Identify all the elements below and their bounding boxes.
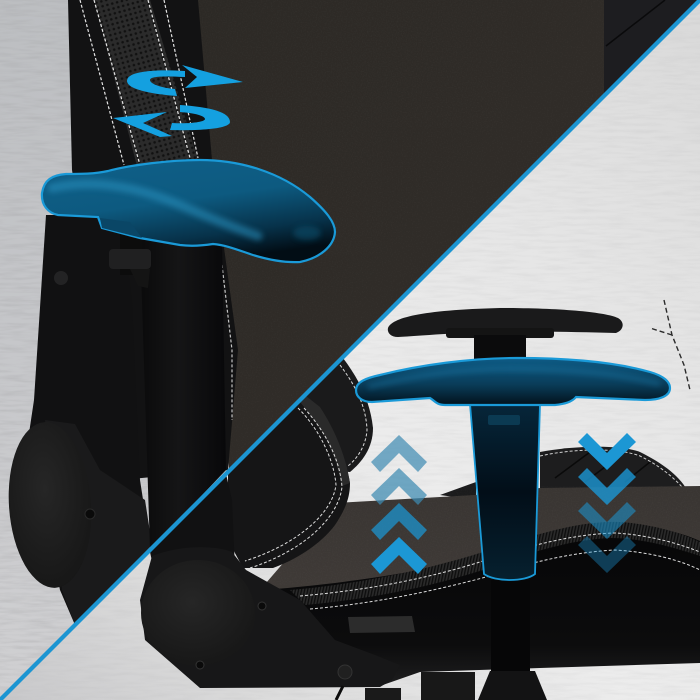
threaded gas lift base xyxy=(421,672,475,700)
small left seat edge xyxy=(440,482,476,496)
perforated leather strip xyxy=(94,0,198,170)
blue armrest post xyxy=(470,404,540,580)
seat back brown fabric xyxy=(190,0,610,480)
disc screw xyxy=(85,509,95,519)
seat back left side xyxy=(68,0,238,480)
seat brown fabric xyxy=(267,486,700,589)
blue highlighted armrest side view xyxy=(42,160,335,262)
rear seat bolster xyxy=(540,447,687,492)
lower back side leather xyxy=(228,396,350,568)
upper back bolster xyxy=(300,358,373,472)
bracket screws xyxy=(196,602,352,679)
side bracket textured base xyxy=(45,420,152,625)
round adjustment button xyxy=(54,271,68,285)
seat pivot disc xyxy=(8,422,60,588)
arrows up xyxy=(371,435,427,574)
front band stitching xyxy=(300,533,700,609)
lower back stitching xyxy=(245,408,342,568)
blue armrest front view xyxy=(356,358,670,405)
rotation arrow bottom xyxy=(113,105,230,137)
armrest underside clip xyxy=(100,218,142,238)
arrows down xyxy=(578,433,636,573)
armrest post xyxy=(148,246,226,547)
seat back upper right side panel xyxy=(604,0,700,96)
side bracket panel xyxy=(28,215,150,625)
release lever xyxy=(109,249,151,288)
reclining lever xyxy=(348,616,415,633)
bolster stitching xyxy=(340,365,367,466)
lever cable and base xyxy=(336,686,401,700)
post clip button xyxy=(488,415,520,425)
bracket pivot disc xyxy=(141,572,225,632)
lower back ribbed edge xyxy=(300,396,350,486)
stitching on seat back xyxy=(80,0,232,450)
lower seat black base xyxy=(260,523,700,686)
background: grey wall upper left xyxy=(0,0,229,642)
armrest band highlight xyxy=(368,369,660,387)
rear bolster stitching xyxy=(540,450,683,488)
chair column below armrest xyxy=(478,580,547,700)
armrest highlight xyxy=(52,184,258,236)
armrest end sheen xyxy=(293,226,321,240)
panel: lower right height view xyxy=(140,308,700,700)
seat mechanism bracket xyxy=(140,554,385,688)
ribbed seat front band xyxy=(290,522,700,605)
lower post xyxy=(150,476,234,559)
rotation arrow top xyxy=(127,65,243,96)
black armrest upper position xyxy=(388,308,623,363)
